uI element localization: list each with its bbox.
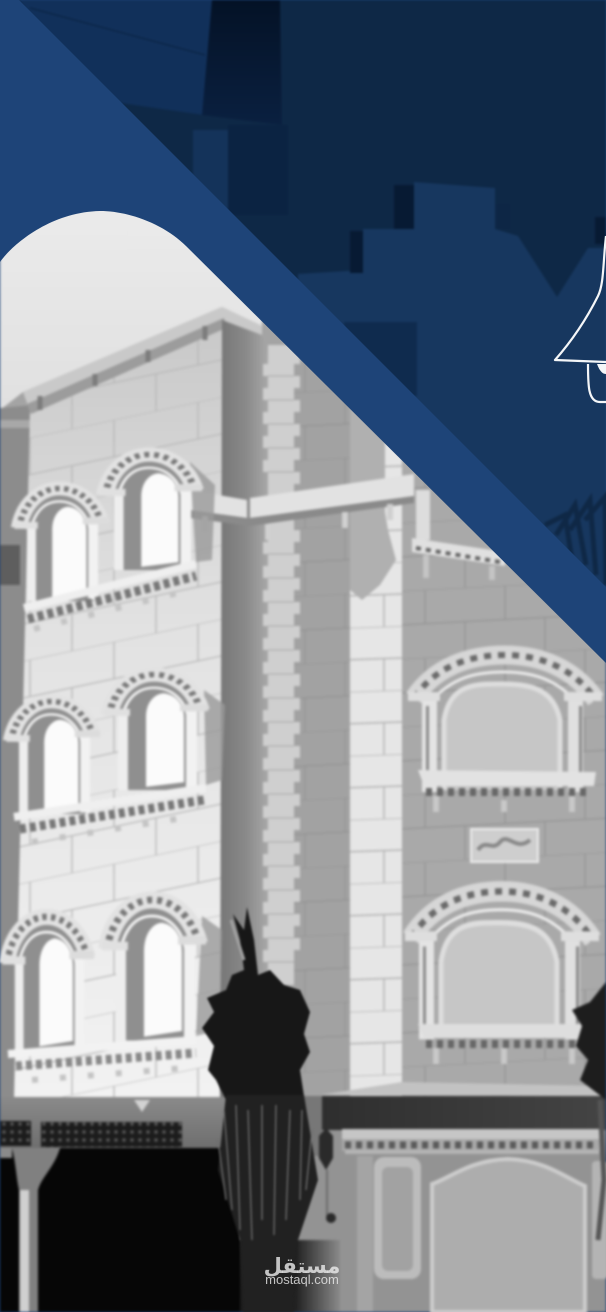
watermark url: mostaql.com (265, 1272, 339, 1287)
bottom window sills (8, 1040, 196, 1080)
palm crown and spike (202, 907, 310, 1100)
top window pair (14, 455, 202, 601)
neighbouring building at left (0, 405, 33, 1100)
palm lower fronds (218, 1095, 318, 1312)
top window sills (24, 564, 196, 629)
quoin column (263, 345, 300, 985)
section right of quoins, shaded (304, 422, 346, 1036)
middle window pair (6, 675, 208, 814)
horizontal string course (190, 474, 414, 540)
sunlit corner strip (350, 400, 402, 1100)
wall shadows beside left windows (190, 462, 225, 1036)
icon: bell outline (555, 236, 606, 402)
right panel (592, 1161, 606, 1279)
ground floor right wall (230, 1096, 606, 1312)
photo base wall tone (2, 320, 294, 989)
entrance cornice (342, 1129, 600, 1154)
name plaque (471, 829, 538, 862)
bottom window pair (2, 900, 206, 1050)
right facade window, upper (408, 655, 602, 812)
roof cornice (23, 307, 262, 414)
sky (0, 205, 262, 410)
ledge (320, 1082, 606, 1096)
watermark (264, 1254, 340, 1287)
wall panel (374, 1157, 421, 1279)
right facade (402, 440, 606, 1100)
right palm (572, 982, 606, 1240)
watermark arabic wordmark: مستقل (264, 1254, 340, 1278)
entrance column (357, 1156, 373, 1312)
door arch (432, 1159, 585, 1312)
middle window sills (14, 788, 206, 842)
upper right window fragment (412, 490, 505, 580)
wall lamp (319, 1128, 336, 1223)
left facade (14, 318, 222, 1100)
right facade window, lower (405, 891, 599, 1064)
palm tree (202, 907, 318, 1312)
shaded column (220, 320, 268, 1100)
ground floor left (0, 1097, 245, 1312)
navy tinted photo, upper right (0, 0, 606, 600)
